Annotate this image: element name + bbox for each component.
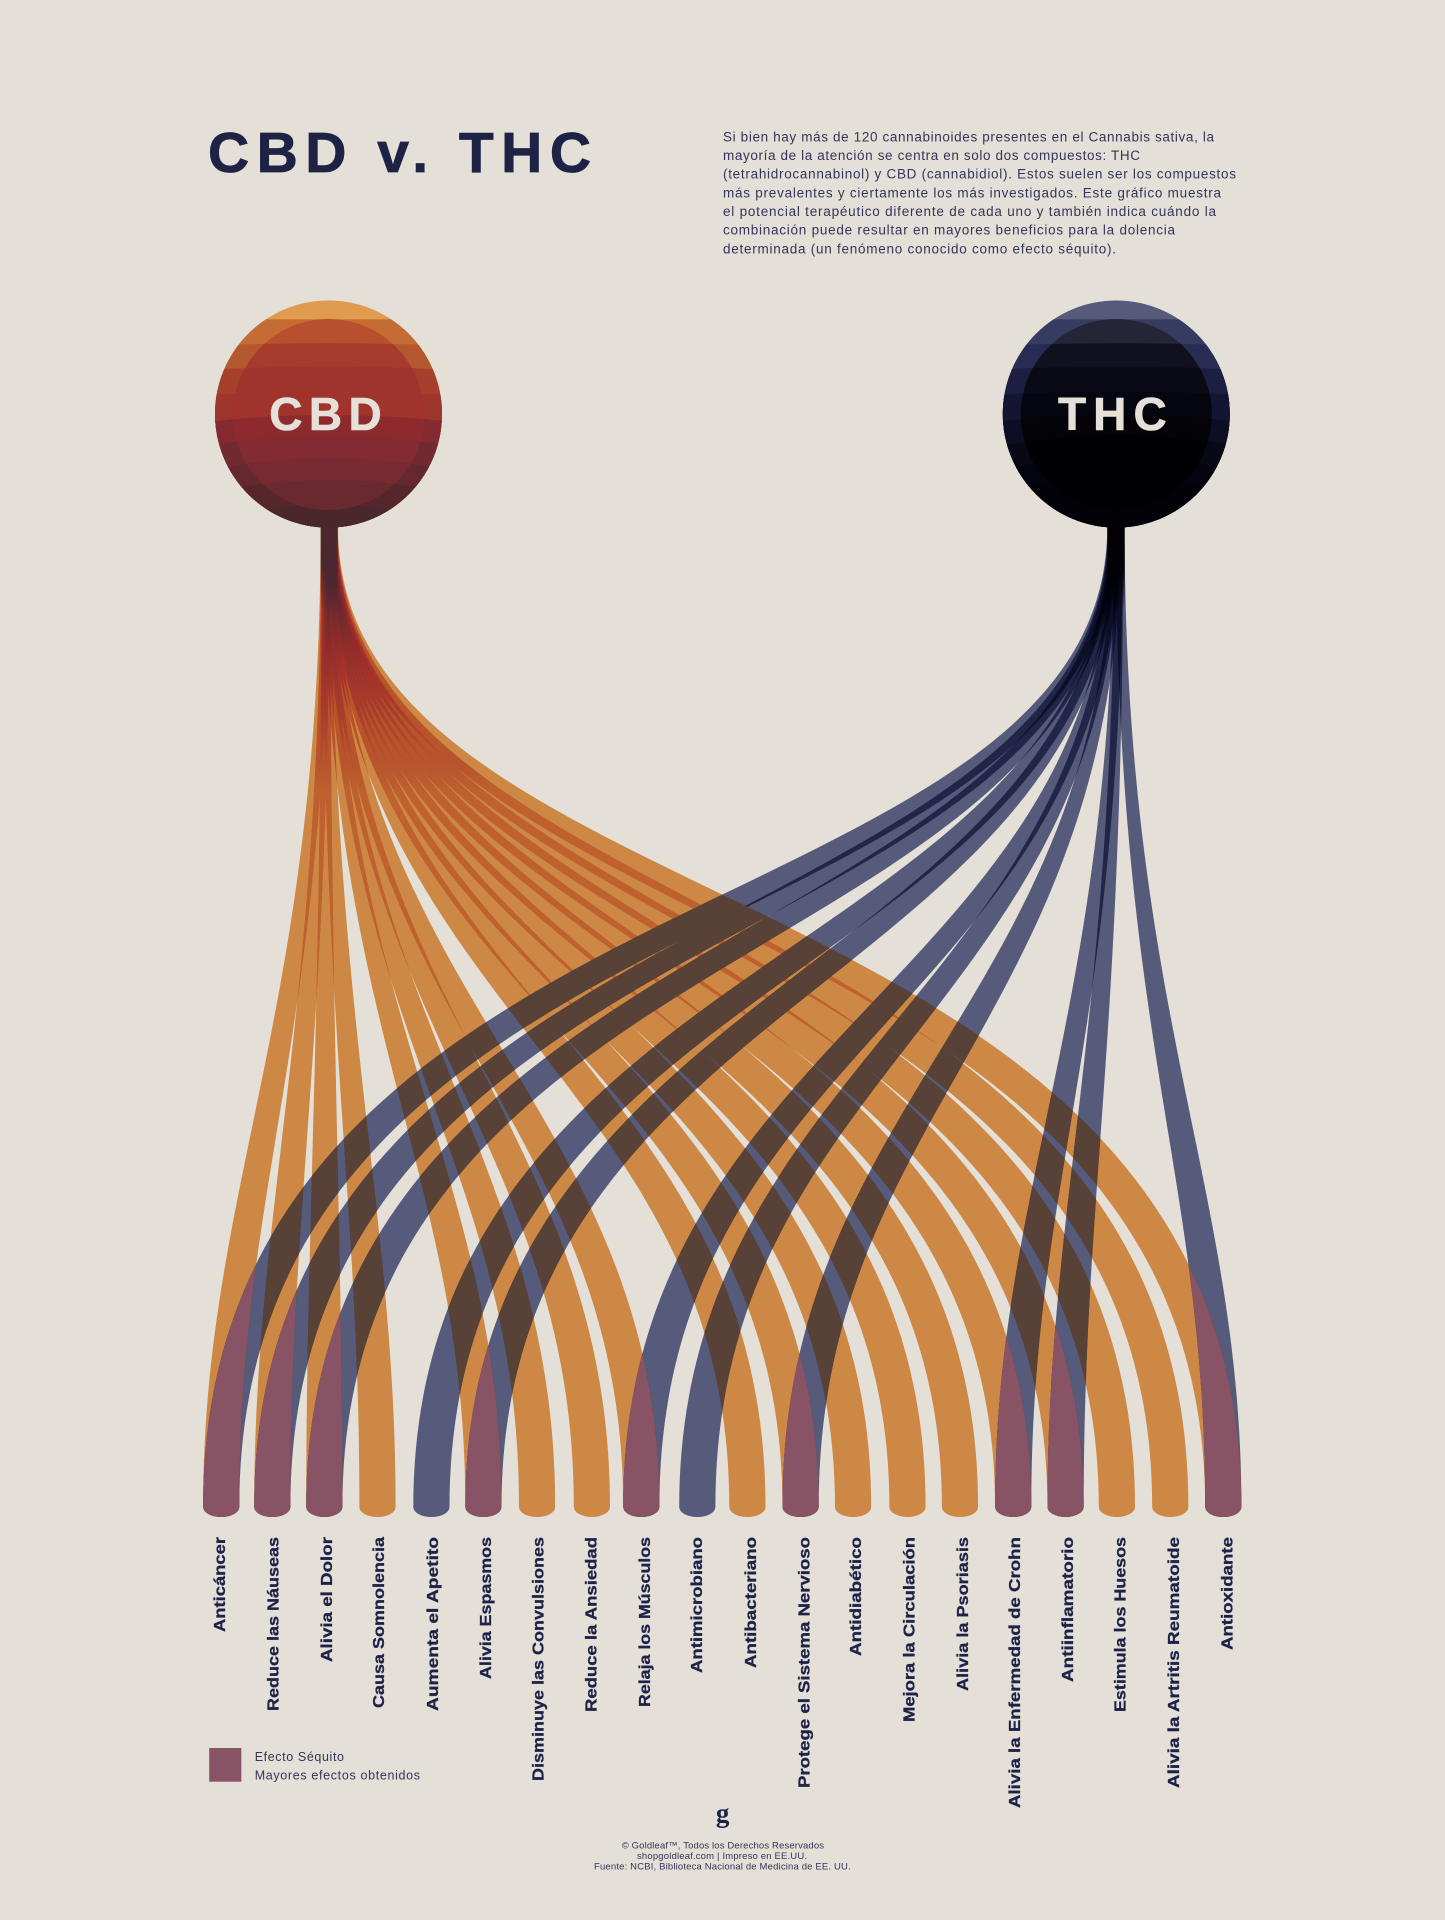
footer credits: © Goldleaf™, Todos los Derechos Reservados (622, 1840, 824, 1851)
CBD ribbon: Protege el Sistema Nervioso (326, 527, 819, 1517)
THC ribbons (203, 527, 1241, 1517)
label: Protege el Sistema Nervioso: Protege el Sistema Nervioso (796, 1537, 814, 1788)
label: Antiinflamatorio: Antiinflamatorio (1060, 1537, 1077, 1682)
label: Estimula los Huesos: Estimula los Huesos (1112, 1537, 1130, 1712)
entourage-effect overlaps: purple (203, 527, 1241, 1517)
CBD sphere (215, 300, 442, 528)
CBD ribbon: Reduce la Ansiedad (324, 527, 610, 1517)
intro text block: combinación puede resultar en mayores beneficios para la dolencia (723, 223, 1175, 238)
CBD ribbon: Relaja los Músculos (324, 527, 659, 1517)
intro text block (723, 129, 1236, 256)
CBD ribbon: Antidiabético (326, 527, 871, 1517)
label: Relaja los Músculos: Relaja los Músculos (637, 1537, 654, 1707)
THC ribbon: Antimicrobiano (679, 527, 1120, 1517)
label: Aumenta el Apetito: Aumenta el Apetito (425, 1537, 442, 1711)
legend text: Efecto Séquito (255, 1750, 344, 1764)
THC ribbon: Antiinflamatorio (1048, 527, 1123, 1517)
intro text block: determinada (un fenómeno conocido como efecto séquito). (723, 241, 1116, 256)
icon: Goldleaf logo: g (716, 1798, 730, 1828)
THC stem (1107, 520, 1125, 610)
legend text (255, 1750, 420, 1782)
THC ribbon: Antioxidante (1116, 527, 1241, 1517)
label: Reduce las Náuseas: Reduce las Náuseas (265, 1537, 282, 1711)
CBD ribbon: Estimula los Huesos (328, 527, 1135, 1517)
CBD ribbon: Anticáncer (203, 527, 329, 1517)
label: Reduce la Ansiedad: Reduce la Ansiedad (584, 1537, 600, 1712)
CBD ribbon: Alivia la Psoriasis (327, 527, 978, 1517)
CBD sphere label: CBD (269, 388, 382, 440)
footer credits: Fuente: NCBI, Biblioteca Nacional de Medicina de EE. UU. (594, 1861, 851, 1872)
label: Antimicrobiano: Antimicrobiano (689, 1537, 706, 1673)
legend swatch (209, 1748, 241, 1782)
label: Antibacteriano: Antibacteriano (743, 1537, 760, 1668)
intro text block: (tetrahidrocannabinol) y CBD (cannabidiol). Estos suelen ser los compuestos (723, 167, 1236, 182)
THC ribbon: Protege el Sistema Nervioso (782, 527, 1121, 1517)
THC ribbon: Reduce las Náuseas (254, 527, 1116, 1517)
CBD ribbon: Alivia Espasmos (323, 527, 502, 1517)
THC ribbon: Aumenta el Apetito (413, 527, 1118, 1517)
THC ribbon: Relaja los Músculos (623, 527, 1120, 1517)
THC ribbon: Anticáncer (203, 527, 1116, 1517)
legend (209, 1748, 420, 1782)
CBD ribbon: Disminuye las Convulsiones (323, 527, 555, 1517)
label: Antioxidante: Antioxidante (1220, 1537, 1237, 1650)
CBD ribbon: Antibacteriano (325, 527, 766, 1517)
THC sphere (1002, 300, 1230, 528)
intro text block: el potencial terapéutico diferente de cada uno y también indica cuándo la (723, 204, 1216, 219)
footer credits (594, 1840, 851, 1872)
CBD ribbon: Causa Somnolencia (322, 527, 396, 1517)
label: Alivia la Psoriasis: Alivia la Psoriasis (955, 1537, 972, 1691)
label: Anticáncer: Anticáncer (212, 1537, 229, 1632)
THC ribbon: Alivia Espasmos (465, 527, 1118, 1517)
CBD ribbon: Alivia el Dolor (306, 527, 342, 1517)
label: Disminuye las Convulsiones: Disminuye las Convulsiones (531, 1537, 548, 1781)
benefit labels (212, 1537, 1237, 1808)
THC sphere label: THC (1058, 388, 1167, 440)
ribbon crossings: brown overlaps (203, 894, 1242, 1517)
CBD ribbon: Reduce las Náuseas (254, 527, 330, 1517)
label: Mejora la Circulación: Mejora la Circulación (902, 1537, 919, 1722)
label: Alivia Espasmos: Alivia Espasmos (478, 1537, 495, 1679)
THC ribbon: Alivia la Enfermedad de Crohn (995, 527, 1123, 1517)
CBD stem (321, 520, 338, 610)
CBD ribbons (203, 527, 1241, 1517)
CBD ribbon: Antioxidante (329, 527, 1241, 1517)
CBD ribbon: Mejora la Circulación (327, 527, 926, 1517)
intro text block: mayoría de la atención se centra en solo dos compuestos: THC (723, 148, 1140, 163)
intro text block: más prevalentes y ciertamente los más investigados. Este gráfico muestra (723, 185, 1221, 200)
intro text block: Si bien hay más de 120 cannabinoides presentes en el Cannabis sativa, la (723, 129, 1214, 144)
THC ribbon: Alivia el Dolor (306, 527, 1117, 1517)
CBD ribbon: Alivia la Enfermedad de Crohn (328, 527, 1031, 1517)
legend text: Mayores efectos obtenidos (255, 1768, 420, 1782)
CBD ribbon: Antiinflamatorio (328, 527, 1084, 1517)
CBD ribbon: Alivia la Artritis Reumatoide (329, 527, 1188, 1517)
footer credits: shopgoldleaf.com | Impreso en EE.UU. (637, 1851, 807, 1862)
label: Alivia la Enfermedad de Crohn: Alivia la Enfermedad de Crohn (1007, 1537, 1024, 1808)
label: Alivia el Dolor: Alivia el Dolor (319, 1537, 336, 1662)
label: Antidiabético: Antidiabético (848, 1537, 865, 1656)
title: CBD v. THC (208, 121, 591, 185)
label: Alivia la Artritis Reumatoide: Alivia la Artritis Reumatoide (1166, 1537, 1183, 1788)
label: Causa Somnolencia: Causa Somnolencia (371, 1537, 388, 1708)
